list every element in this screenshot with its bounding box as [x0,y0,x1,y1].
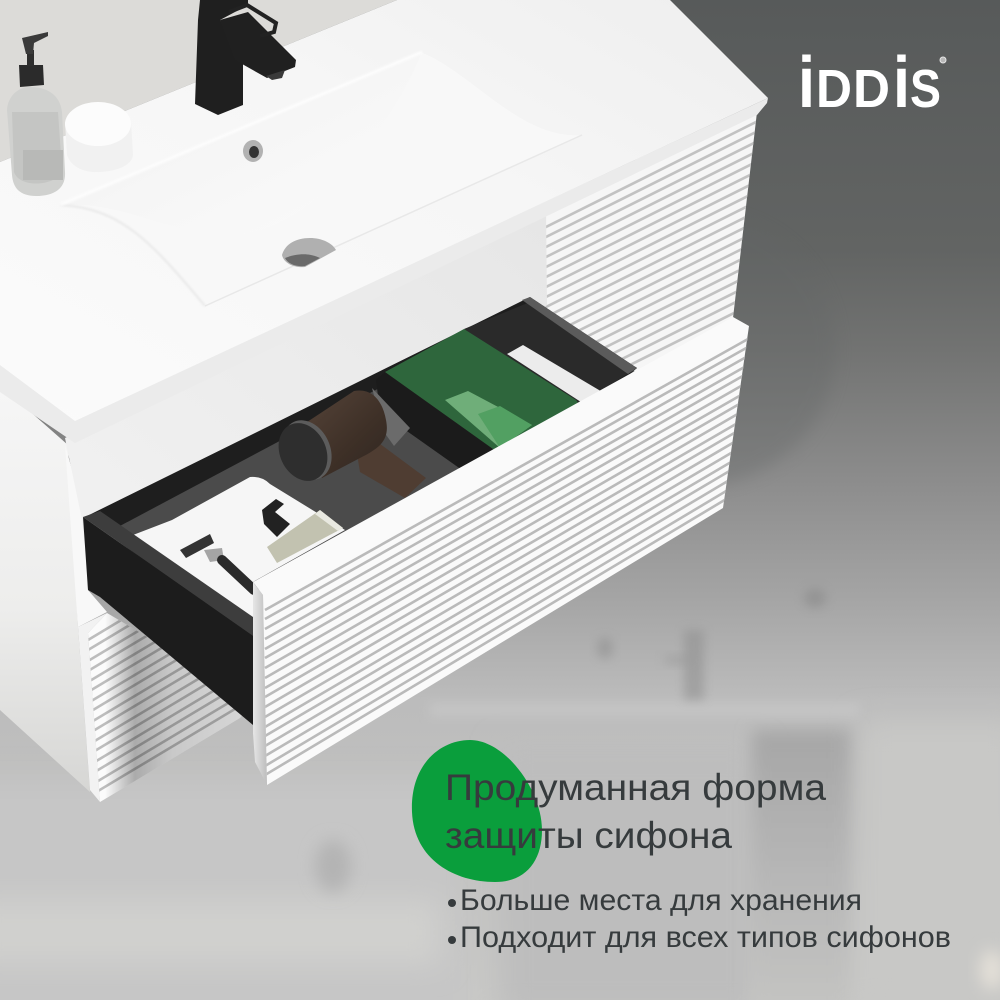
drawer front edge [253,582,267,785]
white side strip [65,445,107,627]
logo: IDDIS: i [798,43,815,123]
drawer rear compartment [464,297,637,405]
speckled wall behind basin [0,0,397,162]
heading [445,767,826,856]
bullet list [448,884,951,954]
logo: IDDIS: S [910,59,941,119]
icon: razor on towel [180,534,254,590]
basin bowl [60,52,582,306]
countertop front edge [0,98,768,443]
icon: cream jar [65,102,133,172]
countertop [0,0,768,421]
icon: hair dryer [269,388,426,498]
white folded towel [133,477,345,634]
cabinet side panel [0,385,90,792]
green translucent organiser [385,329,578,454]
ribbed drawer front [253,317,749,785]
cabinet front rail [65,208,547,590]
upper ribbed drawer front [545,115,757,372]
bullet list: Больше места для хранения [460,884,862,917]
green blob accent [412,740,542,882]
icon: soap bottle [7,32,65,196]
logo: IDDIS [798,43,946,123]
drawer interior [85,297,637,640]
lower ribbed drawer front [78,613,242,802]
logo: IDDIS: D [816,59,852,119]
icon: glass bottle on towel [262,499,343,563]
black drawer side [83,511,253,725]
icon: overflow hole [243,140,263,162]
heading: защиты сифона [445,815,732,856]
heading: Продуманная форма [445,767,826,808]
logo: IDDIS: i [893,43,910,123]
icon: chrome drain [282,238,336,267]
bullet list: Подходит для всех типов сифонов [460,921,951,954]
drawer floor [118,385,500,580]
icon: black faucet [195,0,296,115]
drawer divider [376,372,500,470]
logo: IDDIS: D [853,59,890,119]
